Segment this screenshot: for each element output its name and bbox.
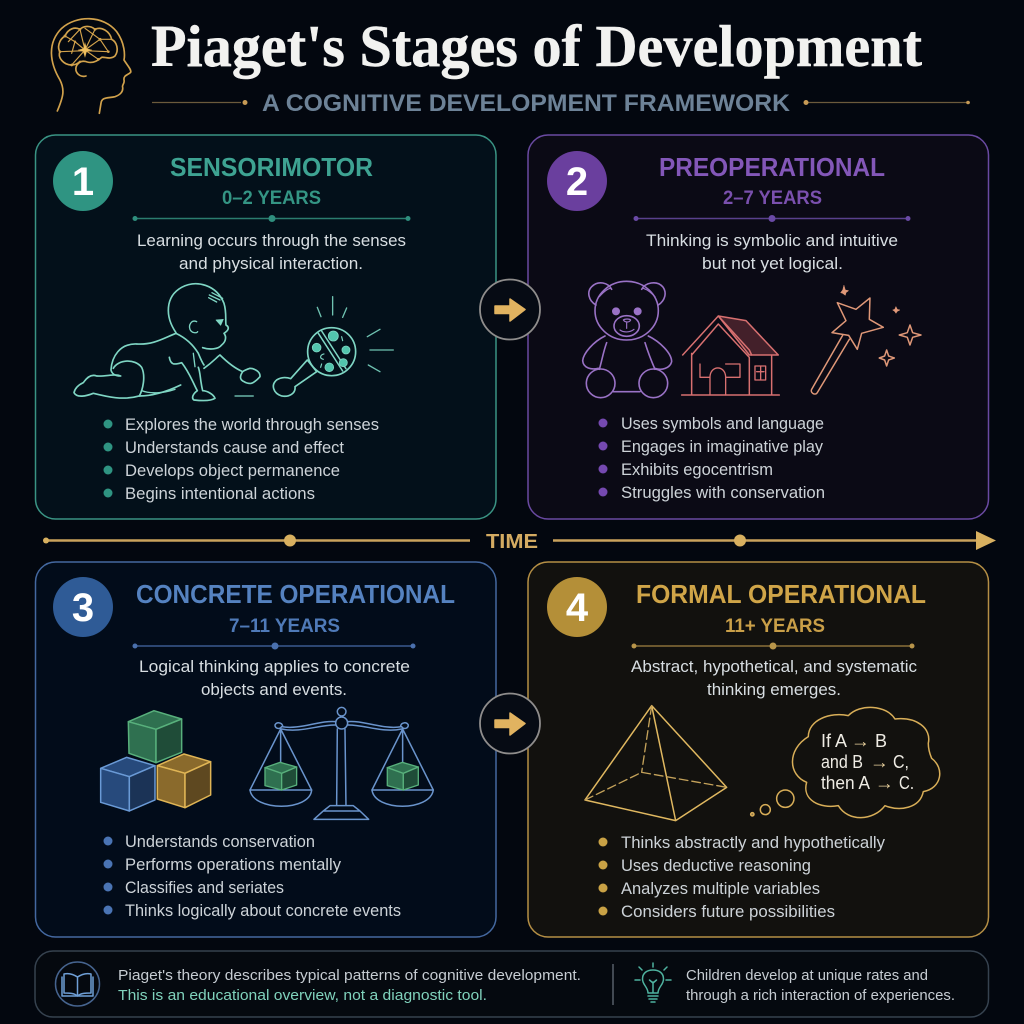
icon: balance scale bbox=[250, 707, 433, 819]
bullet list: Understands cause and effect bbox=[125, 439, 344, 457]
bullet list: Uses deductive reasoning bbox=[621, 857, 811, 875]
arrow: stage 1 to 2 bbox=[480, 280, 540, 340]
heading: PREOPERATIONAL bbox=[659, 152, 885, 182]
age range: 11+ YEARS bbox=[725, 616, 825, 637]
note text: Piaget's theory describes typical patterns of cognitive development. bbox=[118, 967, 581, 984]
timeline arrow bbox=[43, 531, 996, 553]
bullet list: Engages in imaginative play bbox=[621, 438, 824, 456]
bullet list: Exhibits egocentrism bbox=[621, 461, 773, 479]
bullet list bbox=[598, 834, 886, 921]
syllogism text: If A bbox=[821, 731, 847, 751]
description: and physical interaction. bbox=[179, 254, 363, 273]
bullet list: Thinks abstractly and hypothetically bbox=[621, 834, 886, 852]
panel: sensorimotor bbox=[36, 135, 496, 519]
icon: crawling baby bbox=[74, 284, 393, 401]
icon: thought cloud bbox=[751, 707, 940, 818]
description: Abstract, hypothetical, and systematic bbox=[631, 657, 917, 676]
description: Thinking is symbolic and intuitive bbox=[646, 231, 898, 250]
description bbox=[646, 231, 898, 273]
note text: This is an educational overview, not a diagnostic tool. bbox=[118, 987, 487, 1004]
bullet list: Struggles with conservation bbox=[621, 484, 825, 502]
age range: 2–7 YEARS bbox=[723, 188, 822, 209]
side note text bbox=[686, 967, 955, 1004]
bullet list bbox=[598, 415, 825, 502]
bullet list: Performs operations mentally bbox=[125, 856, 342, 874]
subtitle: A COGNITIVE DEVELOPMENT FRAMEWORK bbox=[262, 90, 790, 117]
description: Logical thinking applies to concrete bbox=[139, 657, 410, 676]
description bbox=[139, 657, 410, 699]
bullet list bbox=[104, 416, 379, 503]
footer panel bbox=[35, 951, 988, 1017]
description: thinking emerges. bbox=[707, 680, 841, 699]
arrow: stage 3 to 4 bbox=[480, 694, 540, 754]
bullet list: Considers future possibilities bbox=[621, 903, 835, 921]
number badge 3 bbox=[53, 577, 113, 637]
syllogism text: then A bbox=[821, 773, 870, 793]
icon: house bbox=[682, 316, 779, 395]
syllogism text: C. bbox=[899, 773, 914, 793]
syllogism text: B bbox=[875, 731, 887, 751]
icon: pyramid bbox=[585, 706, 727, 821]
description bbox=[137, 231, 406, 273]
side note text: through a rich interaction of experiences. bbox=[686, 987, 955, 1004]
title: Piaget's Stages of Development bbox=[151, 13, 922, 79]
icon: open book bbox=[56, 962, 100, 1006]
description: but not yet logical. bbox=[702, 254, 843, 273]
syllogism text bbox=[821, 731, 914, 793]
bullet list: Develops object permanence bbox=[125, 462, 340, 480]
number badge 4 bbox=[547, 577, 607, 637]
bullet list bbox=[104, 833, 401, 920]
description: objects and events. bbox=[201, 680, 347, 699]
icon: teddy bear bbox=[583, 281, 672, 398]
bullet list: Understands conservation bbox=[125, 833, 315, 851]
bullet list: Thinks logically about concrete events bbox=[125, 902, 401, 920]
syllogism text: C, bbox=[893, 752, 909, 772]
age range: 7–11 YEARS bbox=[229, 616, 340, 637]
side note text: Children develop at unique rates and bbox=[686, 967, 928, 984]
icon: lightbulb bbox=[635, 963, 671, 1002]
icon: stacked blocks bbox=[101, 711, 211, 811]
age range: 0–2 YEARS bbox=[222, 188, 321, 209]
icon: magic wand bbox=[811, 285, 921, 394]
panel: concrete operational bbox=[36, 562, 496, 937]
number badge 1 bbox=[53, 151, 113, 211]
note text bbox=[118, 967, 581, 1004]
panel: formal operational bbox=[528, 562, 988, 937]
number badge 2: 2 bbox=[566, 160, 588, 204]
description: Learning occurs through the senses bbox=[137, 231, 406, 250]
heading: CONCRETE OPERATIONAL bbox=[136, 579, 455, 609]
heading: FORMAL OPERATIONAL bbox=[636, 579, 926, 609]
bullet list: Analyzes multiple variables bbox=[621, 880, 820, 898]
description bbox=[631, 657, 917, 699]
number badge 1: 1 bbox=[72, 160, 94, 204]
number badge 2 bbox=[547, 151, 607, 211]
number badge 4: 4 bbox=[566, 586, 589, 630]
bullet list: Classifies and seriates bbox=[125, 879, 284, 897]
syllogism text: and B bbox=[821, 752, 863, 772]
syllogism text: → bbox=[870, 752, 889, 772]
panel: preoperational bbox=[528, 135, 988, 519]
heading: SENSORIMOTOR bbox=[170, 152, 373, 182]
syllogism text: → bbox=[851, 731, 870, 751]
time label: TIME bbox=[486, 531, 538, 553]
icon: head with brain network bbox=[51, 19, 131, 113]
bullet list: Uses symbols and language bbox=[621, 415, 824, 433]
syllogism text: → bbox=[875, 773, 894, 793]
bullet list: Begins intentional actions bbox=[125, 485, 315, 503]
number badge 3: 3 bbox=[72, 586, 94, 630]
bullet list: Explores the world through senses bbox=[125, 416, 379, 434]
